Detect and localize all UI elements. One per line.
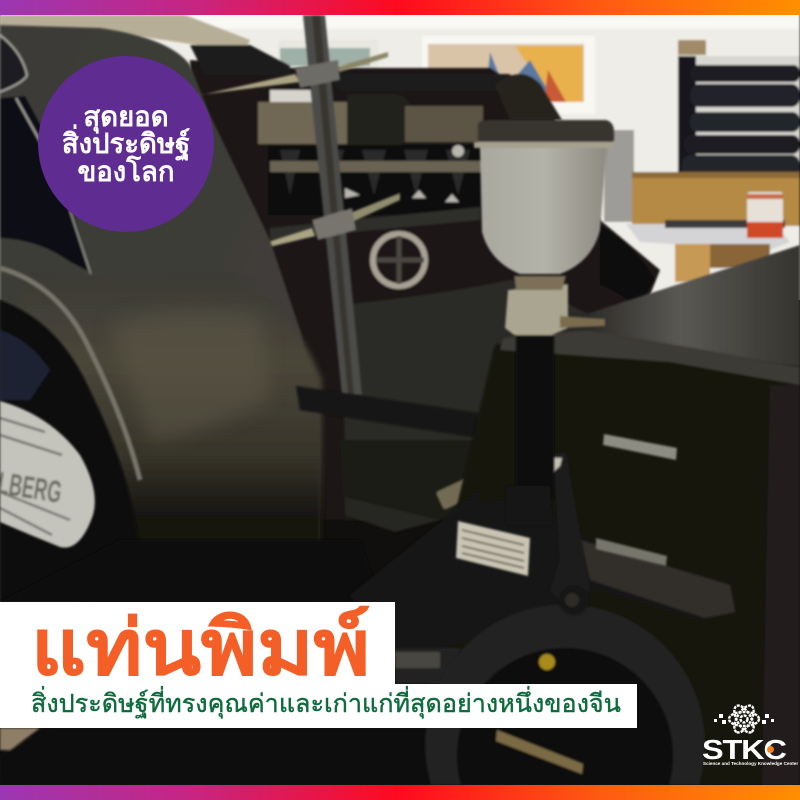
right box front bbox=[350, 330, 800, 785]
metal plates bbox=[456, 434, 677, 576]
bottom gradient bar bbox=[0, 785, 800, 800]
main olive dome body bbox=[20, 270, 322, 640]
machine interior and rollers bbox=[0, 15, 660, 520]
wooden bench with paint can bbox=[626, 172, 800, 282]
Heidelberg nameplate bbox=[0, 401, 95, 548]
large black drum bbox=[340, 280, 600, 440]
tan cylinder bbox=[258, 102, 383, 144]
gear row bbox=[268, 145, 480, 215]
base strip bbox=[395, 648, 462, 684]
title box bbox=[0, 602, 395, 688]
left upper casing bbox=[0, 25, 320, 620]
dark underlay for the lower machine bbox=[0, 300, 800, 785]
logo: STKC bbox=[702, 704, 798, 766]
spiral top binding bbox=[0, 15, 250, 52]
body highlight patches bbox=[110, 309, 270, 440]
subtitle box bbox=[0, 684, 637, 728]
badge line 1: สุดยอด bbox=[83, 101, 169, 132]
vertical rack post and arms bbox=[197, 15, 400, 395]
badge line 3: ของโลก bbox=[77, 156, 174, 187]
black rollers on a rack bbox=[678, 40, 800, 179]
lever handle bbox=[527, 452, 590, 615]
logo tagline: Science and Technology Knowledge Center bbox=[703, 761, 798, 766]
handwheel bbox=[373, 234, 425, 286]
title text: แท่นพิมพ์ bbox=[31, 607, 370, 691]
top gradient bar bbox=[0, 0, 800, 15]
badge: purple circle series label bbox=[38, 56, 214, 232]
rear dark rod bbox=[335, 74, 515, 91]
oil cup on its post bbox=[474, 120, 614, 525]
pale gap behind rod bbox=[270, 90, 325, 102]
subtitle text: สิ่งประดิษฐ์ที่ทรงคุณค่าและเก่าแก่ที่สุดอย่างหนึ่งของจีน bbox=[31, 690, 621, 718]
lower bracket bbox=[350, 490, 738, 660]
grey stack beside the cup bbox=[604, 130, 634, 222]
dark left panel with silver rim bbox=[0, 268, 150, 602]
lower dark base bbox=[0, 478, 475, 785]
logo orange dot bbox=[767, 746, 774, 753]
horizontal black bar bbox=[296, 386, 478, 438]
paintings on the wall bbox=[278, 36, 595, 114]
badge line 2: สิ่งประดิษฐ์ bbox=[62, 128, 190, 159]
logo icon: atom bbox=[714, 704, 774, 734]
logo wordmark: STKC bbox=[702, 734, 786, 765]
casing window bbox=[0, 96, 90, 272]
right box top surface bbox=[583, 245, 800, 367]
large lower wheel bbox=[425, 604, 705, 785]
workshop background bbox=[0, 0, 800, 340]
